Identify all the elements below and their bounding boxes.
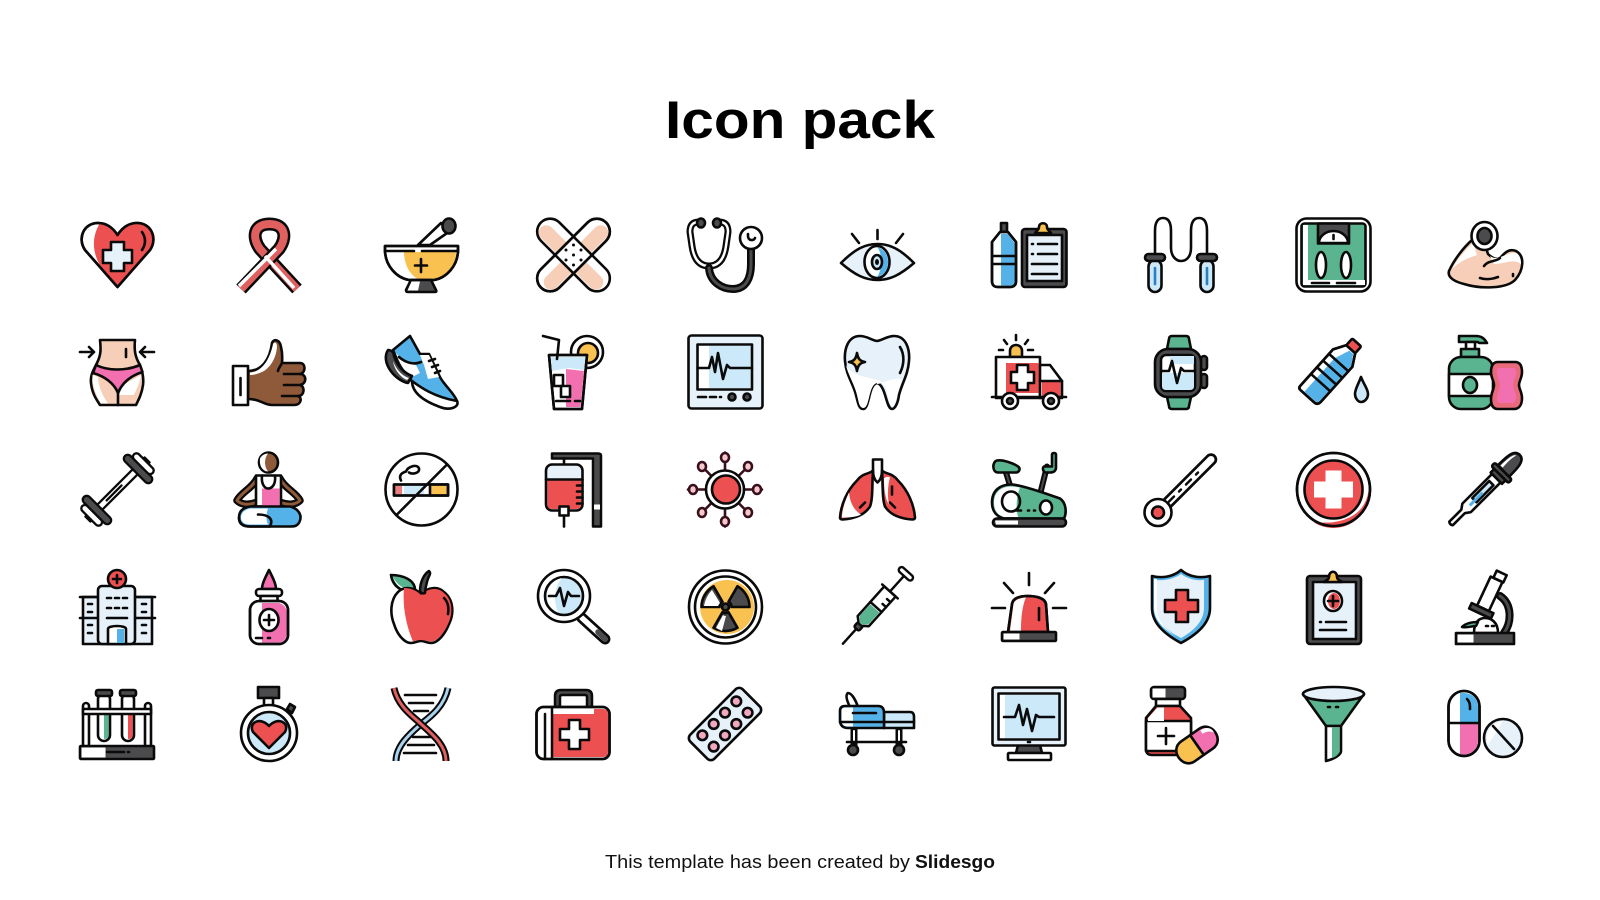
icon: dna helix (394, 688, 448, 761)
icon: exercise bike (992, 453, 1066, 526)
icon: stopwatch with heart (241, 687, 297, 761)
icon: medicine bottle and capsule (1146, 687, 1222, 768)
icon: first aid kit (536, 690, 610, 759)
icon: crossed bandages (532, 213, 615, 297)
icon: eye (841, 230, 914, 280)
icon: dropper (1442, 446, 1528, 533)
icon: leaking plastic bottle (1298, 334, 1368, 405)
icon: blister pack of pills (687, 686, 763, 762)
icon: soap dispenser and sponge (1449, 336, 1522, 409)
icon: jump rope (1145, 218, 1217, 292)
icon: stethoscope (690, 218, 762, 289)
icon: test tube rack (80, 690, 154, 759)
icon: thumbs up (233, 340, 305, 405)
icon: dumbbell (75, 447, 160, 532)
icon: lungs (840, 460, 915, 520)
icon: cold drink (543, 336, 603, 409)
icon: desktop heart monitor (992, 688, 1066, 760)
icon: no smoking (386, 454, 458, 526)
icon: shield with cross (1152, 570, 1210, 643)
icon: heart (82, 223, 153, 287)
icon grid (75, 213, 1528, 768)
icon: iv drip (546, 454, 601, 526)
icon: thermometer (1144, 460, 1211, 526)
icon: weighing scale (1296, 218, 1370, 292)
icon: radiation symbol (689, 570, 762, 644)
icon: emergency siren (992, 573, 1066, 641)
footer credit: This template has been created by (605, 851, 911, 872)
footer credit: Slidesgo (915, 851, 995, 872)
icon: apple (391, 571, 452, 643)
icon: running shoe (386, 336, 458, 409)
icon: hospital stretcher (840, 693, 914, 755)
title: Icon pack (665, 91, 936, 150)
icon: medical report clipboard (1307, 572, 1361, 644)
icon: slim waist (80, 340, 154, 405)
icon: nasal spray (250, 570, 288, 644)
icon: funnel (1303, 687, 1364, 761)
icon: water bottle and clipboard (992, 223, 1066, 287)
icon: awareness ribbon (239, 224, 297, 289)
icon: flexed bicep (1449, 222, 1522, 287)
icon: smartwatch (1155, 336, 1207, 409)
icon: syringe (835, 565, 916, 651)
icon: microscope (1456, 567, 1514, 644)
icon: capsule and tablet (1448, 691, 1522, 757)
icon: tooth (845, 336, 909, 409)
icon: virus (688, 452, 762, 526)
icon: vital signs monitor (688, 336, 762, 408)
icon: medical cross badge (1297, 453, 1370, 528)
icon: magnifying glass with pulse (538, 570, 605, 639)
icon: hospital (80, 570, 155, 644)
icon: meditating person (237, 452, 301, 526)
icon: ambulance (992, 335, 1066, 409)
icon: mortar and pestle (385, 218, 458, 292)
